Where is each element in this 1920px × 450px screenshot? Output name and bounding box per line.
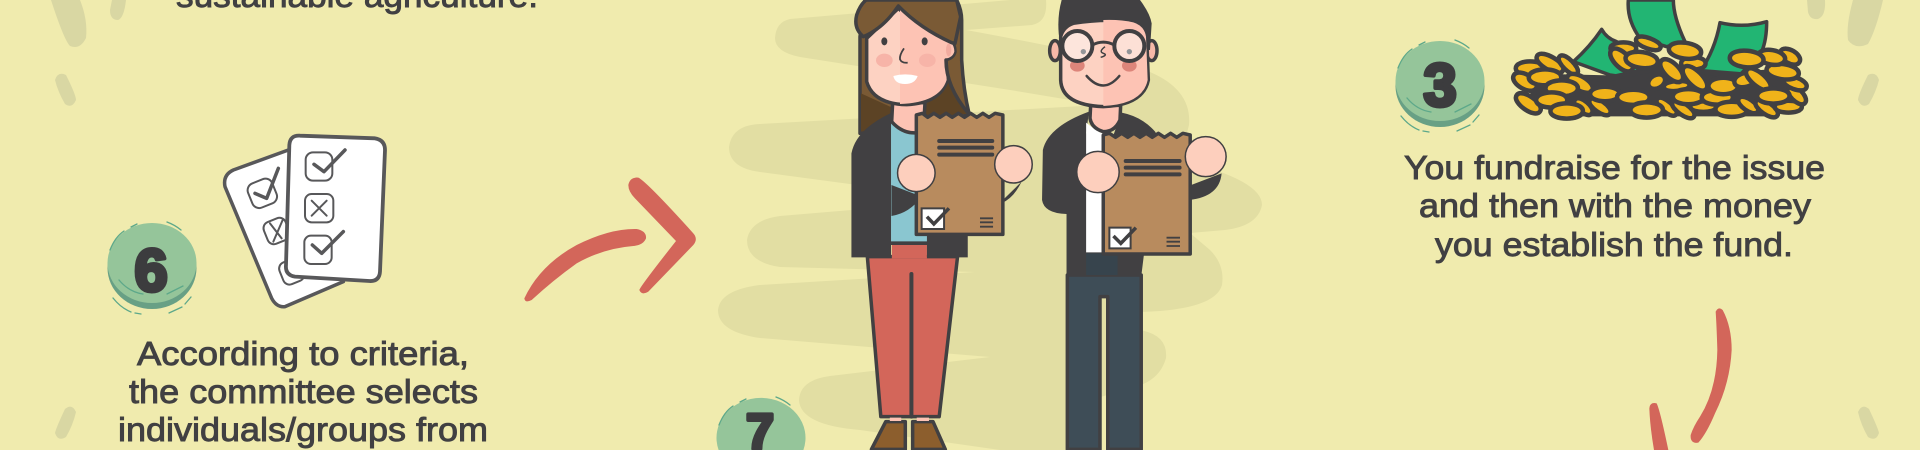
envelope and hands — [1077, 133, 1226, 254]
eyes, cheeks, nose and smile — [876, 37, 936, 84]
glasses — [1062, 31, 1144, 61]
text: step 6 — [118, 335, 488, 448]
number 6: 6 — [134, 237, 168, 304]
banknotes — [1573, 0, 1767, 80]
ears — [1050, 41, 1060, 61]
arrow: red, pointing right to the people — [524, 178, 696, 301]
badge: step 7 — [716, 397, 806, 450]
neck and head — [856, 0, 968, 133]
envelope — [1103, 133, 1190, 254]
body — [1042, 112, 1222, 449]
man holding envelope — [1042, 0, 1226, 449]
icon: voting cards — [225, 136, 385, 307]
hands — [1077, 151, 1119, 193]
shirt — [1086, 123, 1103, 252]
face — [867, 8, 955, 105]
central background scribble — [718, 0, 1262, 450]
belt — [1086, 253, 1118, 275]
fringe — [856, 0, 961, 43]
line 1: You fundraise for the issue — [1404, 149, 1825, 186]
ankles — [890, 418, 929, 421]
number 3: 3 — [1423, 52, 1457, 119]
line 1: According to criteria, — [137, 335, 469, 372]
line 3: you establish the fund. — [1435, 226, 1793, 263]
neck — [1090, 105, 1121, 132]
ear — [946, 44, 951, 56]
pants — [1067, 275, 1141, 449]
coins — [1513, 37, 1806, 118]
hair — [1058, 0, 1152, 50]
hair back — [860, 0, 969, 133]
jacket — [1042, 112, 1222, 277]
badge: step 3 — [1396, 40, 1484, 132]
shoes — [871, 422, 945, 449]
line 2: the committee selects — [129, 373, 478, 410]
pants — [867, 257, 958, 417]
shirt — [891, 123, 928, 243]
hands — [898, 154, 935, 192]
line 2: and then with the money — [1419, 187, 1812, 224]
envelope — [916, 113, 1003, 234]
body — [851, 112, 1022, 449]
neck — [892, 103, 925, 133]
badge: step 6 — [108, 222, 196, 314]
head — [1050, 0, 1157, 132]
icon: money and coins pile — [1513, 0, 1806, 118]
envelope and hands — [898, 113, 1032, 234]
jacket — [851, 112, 1022, 257]
front card — [286, 136, 385, 281]
text: step 3 — [1404, 149, 1825, 263]
back card — [225, 150, 343, 307]
cheeks and smile — [1070, 60, 1137, 85]
woman holding envelope — [851, 0, 1032, 449]
face — [1061, 20, 1148, 107]
arrow: red, pointing down — [1649, 308, 1732, 450]
right hair line — [946, 60, 968, 113]
line 3: individuals/groups from — [118, 411, 488, 448]
